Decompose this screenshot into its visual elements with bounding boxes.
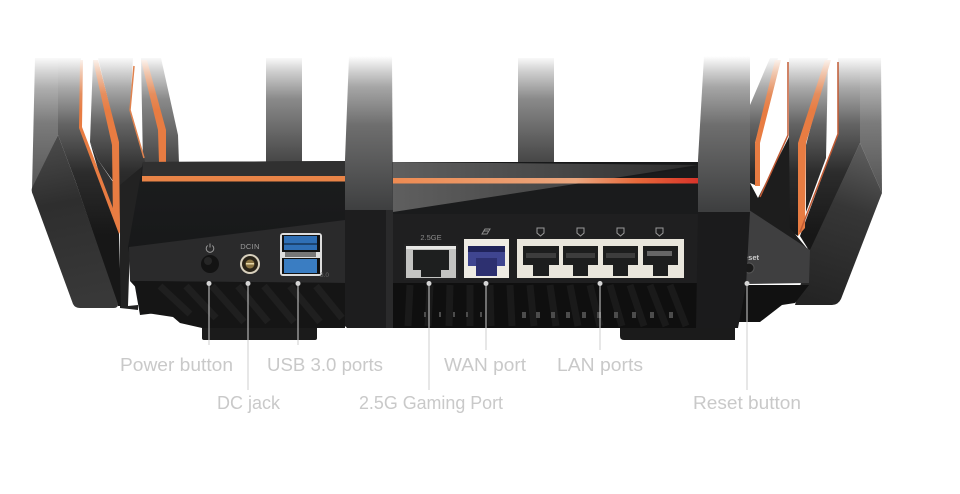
left front antenna <box>32 58 121 308</box>
LAN icons <box>537 228 663 236</box>
callout line: WAN <box>484 281 488 350</box>
port panel <box>393 214 700 283</box>
callout line: LAN <box>598 281 602 350</box>
DC label: DCIN <box>240 242 260 251</box>
LAN ports <box>517 228 684 278</box>
callout line: power button <box>206 281 212 345</box>
right front antenna <box>795 58 882 305</box>
reset button <box>744 263 754 273</box>
orange strip left <box>142 176 345 182</box>
DC jack <box>240 242 260 274</box>
center back antennas <box>266 58 554 163</box>
WAN port <box>464 229 509 278</box>
callout line: reset <box>744 281 750 390</box>
label: Power button: Power button <box>120 355 233 375</box>
USB ports <box>280 233 329 279</box>
router body: center section <box>392 162 735 340</box>
callout line: 2.5G <box>426 281 432 390</box>
center pillar <box>345 56 393 328</box>
vents left <box>130 281 345 328</box>
power button <box>201 244 219 273</box>
label: DC jack: DC jack <box>217 393 281 413</box>
power icon <box>206 244 214 252</box>
label: Reset button: Reset button <box>693 393 801 413</box>
vents center <box>392 283 697 328</box>
callout line: USB <box>296 281 300 345</box>
label: WAN port: WAN port <box>444 355 526 375</box>
USB label: 3.0 <box>320 272 329 279</box>
orange strip center <box>393 178 698 184</box>
foot left <box>202 328 317 340</box>
2.5G port <box>404 233 458 280</box>
WAN icon <box>482 229 490 234</box>
label: 2.5G Gaming Port: 2.5G Gaming Port <box>359 393 503 413</box>
front panel left <box>129 220 345 283</box>
right side panel <box>730 210 810 322</box>
2.5G label: 2.5GE <box>420 233 442 242</box>
label: USB 3.0 ports: USB 3.0 ports <box>267 355 383 375</box>
foot right <box>620 328 735 340</box>
label: LAN ports: LAN ports <box>557 355 643 375</box>
router body: left section <box>128 161 345 340</box>
callout line: DC jack <box>246 281 250 390</box>
right pillar <box>696 56 750 328</box>
left back antenna <box>98 58 179 310</box>
reset label: eset <box>744 253 760 262</box>
right back antenna <box>750 58 828 252</box>
